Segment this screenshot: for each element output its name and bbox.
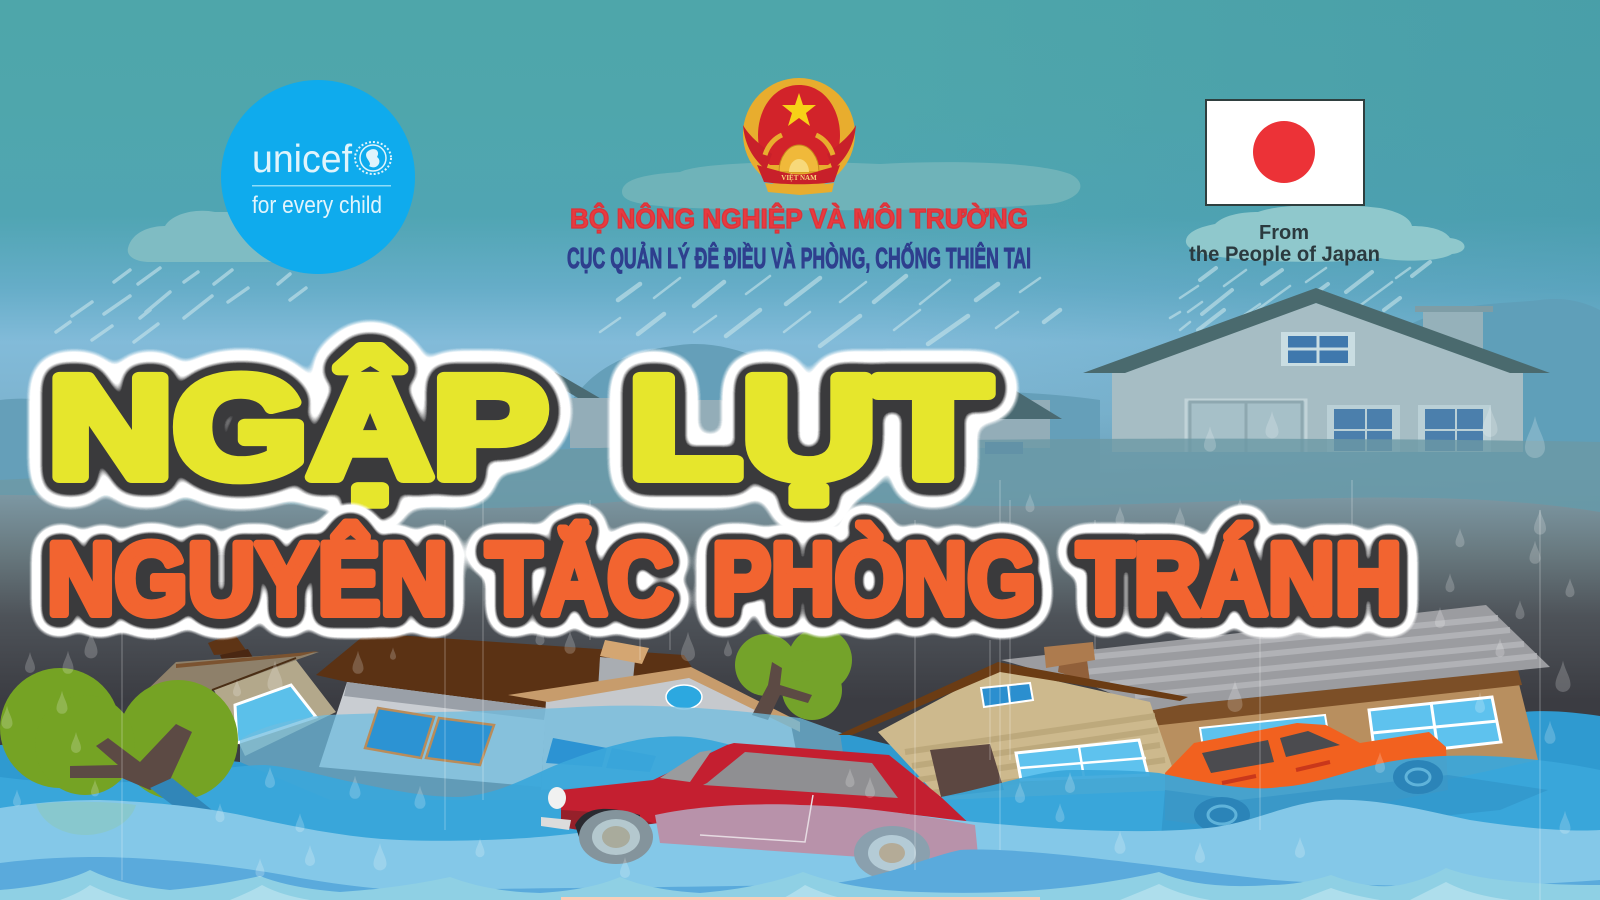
- tagline: for every child: [252, 192, 382, 219]
- window behind car: [1200, 715, 1330, 760]
- gable wall: [878, 668, 1180, 800]
- fascia: [1151, 670, 1522, 726]
- middle blue wave: [0, 736, 1600, 900]
- roof stripes: [1060, 618, 1537, 696]
- darker front wave: [0, 850, 1600, 900]
- submerged car shape: [1160, 775, 1548, 850]
- house: long grey roof: [1001, 605, 1550, 790]
- title: subtitle line: TẮC: [486, 522, 673, 636]
- rain slashes under the clouds: [56, 262, 1430, 346]
- logo: Vietnam national emblem: VIỆT NAM: [781, 174, 817, 182]
- upper window: [1281, 332, 1355, 366]
- title: subtitle line: NGUYÊN: [47, 522, 448, 636]
- text: from the people of Japan: From: [1259, 222, 1309, 244]
- red car: [561, 743, 976, 857]
- window right: [1418, 405, 1491, 455]
- unicef emblem: [355, 142, 391, 174]
- foreground wavelets: [0, 868, 1600, 900]
- house: tan gable: [838, 662, 1188, 800]
- tree: left: [0, 668, 238, 800]
- window: [1016, 740, 1148, 780]
- tilted house: gable with round window: [508, 640, 800, 790]
- cloud: behind ministry name: [622, 162, 1080, 210]
- logo: Japan flag: [1206, 100, 1364, 205]
- trunk: [70, 724, 192, 790]
- submerged body: [655, 804, 978, 860]
- house: upper right: [1083, 288, 1550, 462]
- title: subtitle line: PHÒNG: [712, 522, 1036, 636]
- text: from the people of Japan: [1189, 222, 1380, 266]
- logo: UNICEF: [221, 80, 415, 274]
- rice ears: [765, 135, 833, 155]
- distant hills: [0, 299, 1600, 480]
- title: main line: [48, 347, 990, 508]
- headlight: [548, 787, 566, 809]
- title: subtitle line: [47, 522, 1402, 636]
- bumper: [541, 817, 571, 830]
- siding lines: [905, 716, 1165, 794]
- text: from the people of Japan: the People of Japan: [1189, 243, 1380, 266]
- distant flood band: [0, 439, 1600, 560]
- front light wave: [0, 800, 1600, 900]
- door line: [700, 795, 813, 842]
- submerged windows of tilted houses: [365, 708, 656, 772]
- heading: department name: CỤC QUẢN LÝ ĐÊ ĐIỀU VÀ PHÒNG, CHỐNG THIÊN TAI: [567, 241, 1031, 275]
- chimney: [1044, 642, 1095, 682]
- back water: [0, 711, 1600, 900]
- cogwheel: [779, 145, 819, 172]
- title: main line: LỤT: [628, 347, 990, 508]
- title: subtitle line: TRÁNH: [1077, 522, 1402, 636]
- unicef wordmark: unicef: [252, 138, 352, 181]
- upper window: [981, 683, 1033, 707]
- heading: ministry name: BỘ NÔNG NGHIỆP VÀ MÔI TRƯỜNG: [570, 202, 1028, 234]
- tree: centre: [735, 628, 852, 720]
- rain drops: [1, 406, 1574, 878]
- title: main line: NGẬP: [48, 347, 548, 508]
- front wheel: [575, 809, 653, 864]
- wall: [1112, 303, 1523, 452]
- large tilted house with brown roof: [316, 633, 700, 787]
- round window: [666, 685, 702, 709]
- translucent water over tilted houses: [240, 706, 850, 830]
- submerged orange car wheels: [1194, 760, 1443, 833]
- window right: [1369, 697, 1501, 756]
- lower ribbon: [757, 165, 840, 184]
- cloud: behind Japan text: [1186, 205, 1465, 262]
- base: [765, 183, 834, 195]
- tilted house: far left: [145, 633, 336, 756]
- pink strip at bottom: [561, 897, 1040, 900]
- rain streaks: [122, 480, 1540, 900]
- cloud: behind UNICEF logo: [128, 211, 304, 262]
- rear wheel: [854, 826, 930, 880]
- orange car: [1165, 723, 1448, 830]
- door: [930, 744, 1004, 797]
- red car parts above the wave: [541, 787, 978, 880]
- chimney: [598, 640, 649, 690]
- dark storm hill: [0, 492, 1600, 900]
- chimney: [1415, 306, 1493, 348]
- window left: [1327, 405, 1400, 455]
- roof: [1001, 605, 1550, 710]
- wall: [1151, 680, 1538, 790]
- submerged trunk of left tree: [150, 778, 232, 830]
- logo: Vietnam national emblem: [743, 78, 856, 195]
- fascia: [838, 662, 1188, 735]
- far house behind the title: [548, 372, 1062, 454]
- roof: [1083, 288, 1550, 373]
- garage door: [1184, 398, 1308, 439]
- star: [782, 93, 816, 126]
- red ribbons at sides: [743, 125, 856, 170]
- submerged foliage under front wave: [36, 802, 136, 835]
